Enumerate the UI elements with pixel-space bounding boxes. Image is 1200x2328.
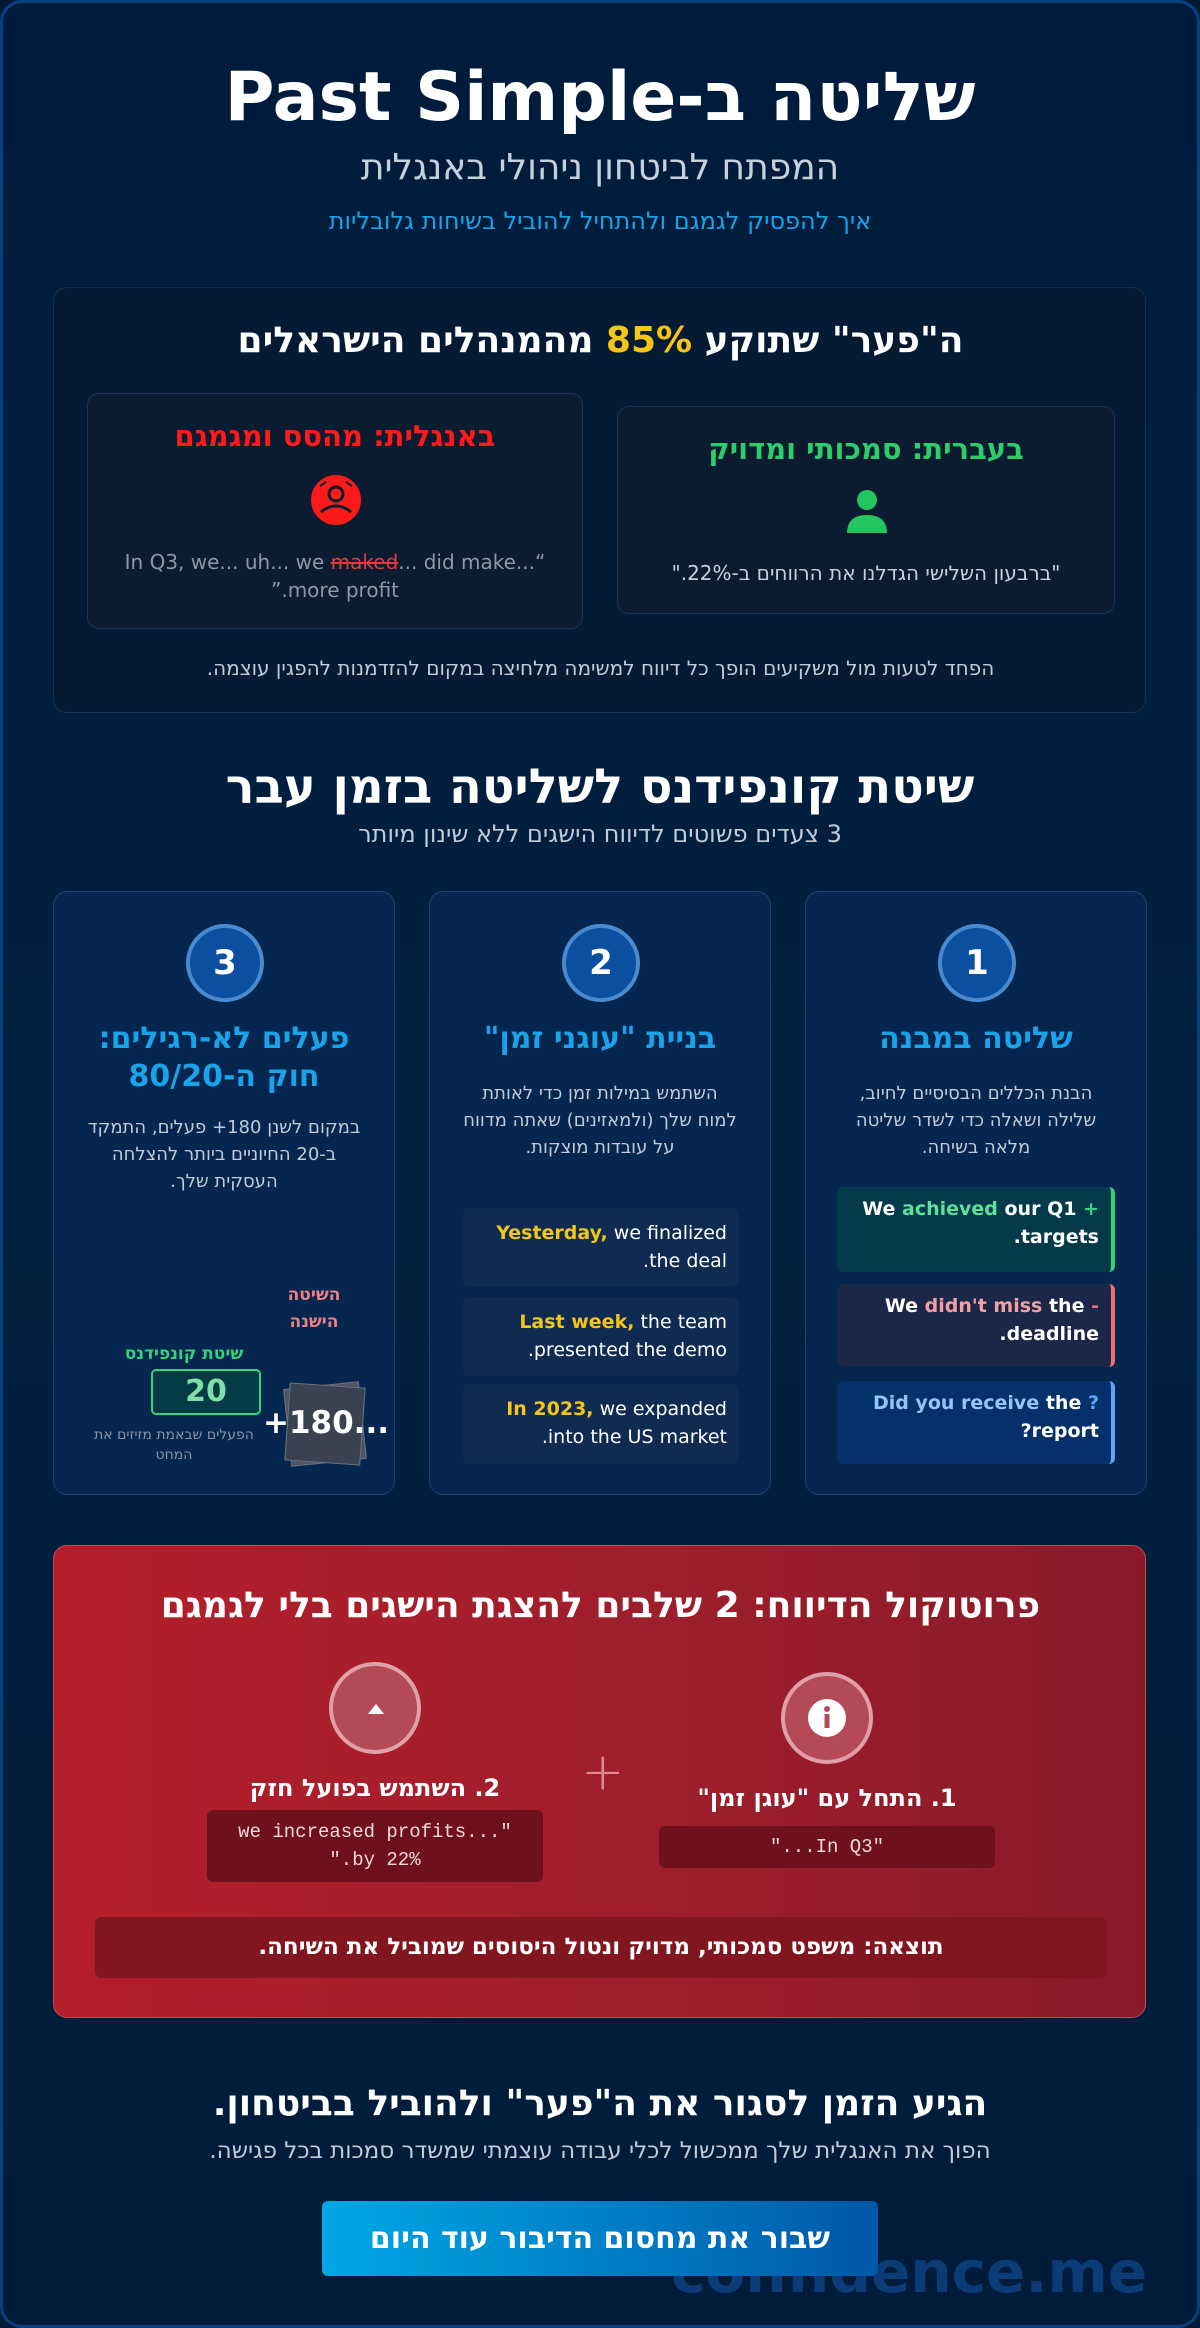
subtitle: המפתח לביטחון ניהולי באנגלית xyxy=(361,147,839,188)
example: last week: Last week, the team presented the demo. xyxy=(519,1311,727,1361)
section heading: method: שיטת קונפידנס לשליטה בזמן עבר xyxy=(226,759,974,815)
description 3: במקום לשנן 180+ פעלים, התמקד xyxy=(88,1117,360,1138)
heading: hebrew: בעברית: סמכותי ומדויק xyxy=(708,432,1024,466)
example: yesterday: Yesterday, we finalized the deal. xyxy=(496,1222,727,1272)
step 1 xyxy=(659,1672,995,1868)
number 2: 2 xyxy=(589,943,613,983)
example: negative xyxy=(837,1284,1115,1367)
heading 3: פעלים לא-רגילים: xyxy=(99,1021,349,1056)
step card 3 xyxy=(53,891,395,1495)
closing heading: הגיע הזמן לסגור את ה"פער" ולהוביל בביטחון. xyxy=(213,2083,987,2124)
label: old method: השיטה הישנה xyxy=(288,1285,340,1332)
stack: 180+ xyxy=(263,1381,389,1467)
icon: stressed person xyxy=(311,475,361,525)
icon: up arrow xyxy=(329,1662,421,1754)
number 2 xyxy=(562,924,640,1002)
heading 3: חוק ה-80/20 xyxy=(129,1059,319,1094)
footnote: הפחד לטעות מול משקיעים הופך כל דיווח למשימה מלחיצה במקום להזדמנות להפגין עוצמה. xyxy=(207,656,994,680)
quote: hebrew: "ברבעון השלישי הגדלנו את הרווחים ב-22%." xyxy=(672,561,1060,585)
watermark: confidence.me xyxy=(671,2238,1147,2306)
heading 1: שליטה במבנה xyxy=(879,1021,1073,1056)
caption: 20 verbs: הפעלים שבאמת מזיזים את המחט xyxy=(94,1427,254,1463)
description 2: השתמש במילות זמן כדי לאותת xyxy=(482,1083,718,1104)
description 1: הבנת הכללים הבסיסיים לחיוב, xyxy=(860,1083,1092,1104)
step 2 xyxy=(207,1662,543,1882)
example: 2023: In 2023, we expanded into the US market. xyxy=(506,1398,727,1448)
heading 3 xyxy=(99,1021,349,1094)
result bar: תוצאה: משפט סמכותי, מדויק ונטול היסוסים שמוביל את השיחה. xyxy=(258,1934,944,1960)
example: question xyxy=(837,1381,1115,1464)
example: positive: + We achieved our Q1 targets. xyxy=(862,1198,1099,1248)
description 1: מלאה בשיחה. xyxy=(922,1137,1030,1158)
example: last week xyxy=(463,1297,739,1376)
panel: reporting protocol xyxy=(53,1545,1146,2018)
stack: 180+: +180... xyxy=(263,1405,389,1441)
box: 20: 20 xyxy=(185,1374,227,1409)
step card 2 xyxy=(429,891,771,1495)
protocol heading: פרוטוקול הדיווח: 2 שלבים להצגת הישגים בלי לגמגם xyxy=(161,1585,1040,1626)
plus sign: + xyxy=(581,1742,625,1802)
icon: confident person xyxy=(847,490,887,533)
title: שליטה ב-Past Simple xyxy=(225,58,975,137)
label step 1: 1. התחל עם "עוגן זמן" xyxy=(697,1784,957,1812)
card: english xyxy=(87,393,583,629)
quote: english: “In Q3, we... uh... we maked... did make... more profit.” xyxy=(125,550,545,602)
code: increased profits: ".by 22% xyxy=(329,1849,421,1871)
code: in Q3 xyxy=(659,1826,995,1868)
CTA button xyxy=(322,2201,878,2276)
CTA button: שבור את מחסום הדיבור עוד היום xyxy=(370,2221,830,2256)
description 2: על עובדות מוצקות. xyxy=(525,1137,675,1158)
card: hebrew xyxy=(617,406,1115,614)
description 3: העסקית שלך. xyxy=(170,1171,278,1192)
result bar xyxy=(95,1917,1107,1978)
example: yesterday xyxy=(463,1208,739,1287)
description 2 xyxy=(463,1083,737,1158)
heading 2: בניית "עוגני זמן" xyxy=(484,1021,716,1056)
example: positive xyxy=(837,1187,1115,1272)
tagline: איך להפסיק לגמגם ולהתחיל להוביל בשיחות גלובליות xyxy=(329,207,871,235)
section subheading: 3 צעדים פשוטים לדיווח הישגים ללא שינון מיותר xyxy=(358,820,842,848)
description 1: שלילה ושאלה כדי לשדר שליטה xyxy=(856,1110,1096,1131)
description 3 xyxy=(88,1117,360,1192)
code: increased profits: we increased profits..." xyxy=(238,1821,512,1843)
description 3: ב-20 החיוניים ביותר להצלחה xyxy=(112,1144,336,1165)
icon: info xyxy=(781,1672,873,1764)
number 1 xyxy=(938,924,1016,1002)
description 2: למוח שלך (ולמאזינים) שאתה מדווח xyxy=(463,1110,737,1131)
example: 2023 xyxy=(463,1384,739,1464)
closing subtext: הפוך את האנגלית שלך ממכשול לכלי עבודה עוצמתי שמשדר סמכות בכל פגישה. xyxy=(209,2138,991,2164)
number 1: 1 xyxy=(965,943,989,983)
panel heading: ה"פער" שתוקע 85% מהמנהלים הישראלים xyxy=(238,320,963,361)
example: question: ? Did you receive the report? xyxy=(873,1392,1099,1442)
comparison: 20 vs 180 xyxy=(94,1285,389,1467)
label step 2: 2. השתמש בפועל חזק xyxy=(250,1774,500,1802)
example: negative: - We didn't miss the deadline. xyxy=(885,1295,1099,1345)
code: in Q3: "In Q3..." xyxy=(770,1836,884,1858)
box: 20 xyxy=(151,1369,261,1415)
heading: english: באנגלית: מהסס ומגמגם xyxy=(175,419,495,453)
description 1 xyxy=(856,1083,1096,1158)
number 3 xyxy=(186,924,264,1002)
step card 1 xyxy=(805,891,1147,1495)
panel: the gap xyxy=(53,287,1146,713)
label: confidence method: שיטת קונפידנס xyxy=(125,1344,243,1364)
number 3: 3 xyxy=(213,943,237,983)
code: increased profits xyxy=(207,1810,543,1882)
